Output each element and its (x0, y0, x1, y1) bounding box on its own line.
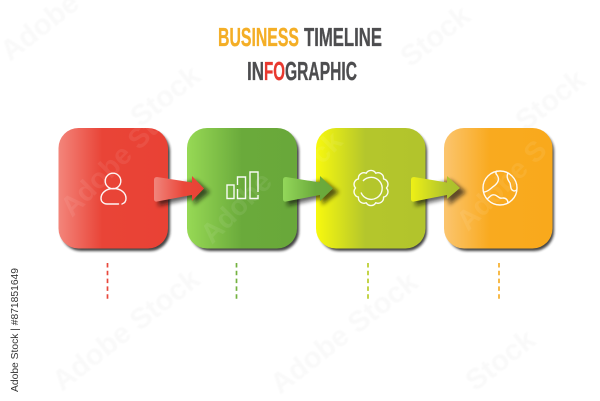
background watermarks: Stock (395, 0, 477, 74)
title line 1: TIMELINE (304, 22, 382, 52)
panel: card 2 green: Adobe (194, 166, 278, 249)
panel: card 2 green (187, 128, 299, 251)
panel: card 3 lime: ck (304, 125, 349, 169)
background watermarks: Stock (510, 63, 592, 138)
panel: card 1 red: Adobe St (54, 113, 163, 222)
background watermarks: Stock (125, 59, 207, 134)
title line 2: GRAPHIC (285, 56, 357, 86)
panel: card 4 orange: Adobe S (450, 134, 553, 236)
background watermarks: Stock (460, 323, 542, 398)
icon: bar chart (227, 172, 258, 198)
title line 1: BUSINESS (218, 22, 299, 52)
icon: gear (354, 170, 388, 206)
title (218, 22, 382, 86)
dashed connector: lime (367, 263, 369, 301)
arrow: green to lime (283, 176, 339, 206)
icon: person (101, 173, 126, 204)
title line 2 (247, 56, 357, 86)
background watermarks: Adobe Stock (47, 263, 207, 398)
panel: card 3 lime (304, 125, 427, 251)
arrow: lime to orange (411, 176, 466, 206)
arrow: red to green (154, 176, 210, 206)
dashed connector: red (106, 263, 108, 301)
title line 2: FO (264, 56, 285, 86)
dashed connector: green (236, 263, 238, 301)
background watermarks: Adobe Stock (265, 266, 425, 401)
icon: globe (483, 171, 517, 205)
title line 2: IN (247, 56, 264, 86)
dashed connector: orange (498, 263, 500, 301)
stock id caption: Adobe Stock | #871851649 (9, 268, 21, 392)
